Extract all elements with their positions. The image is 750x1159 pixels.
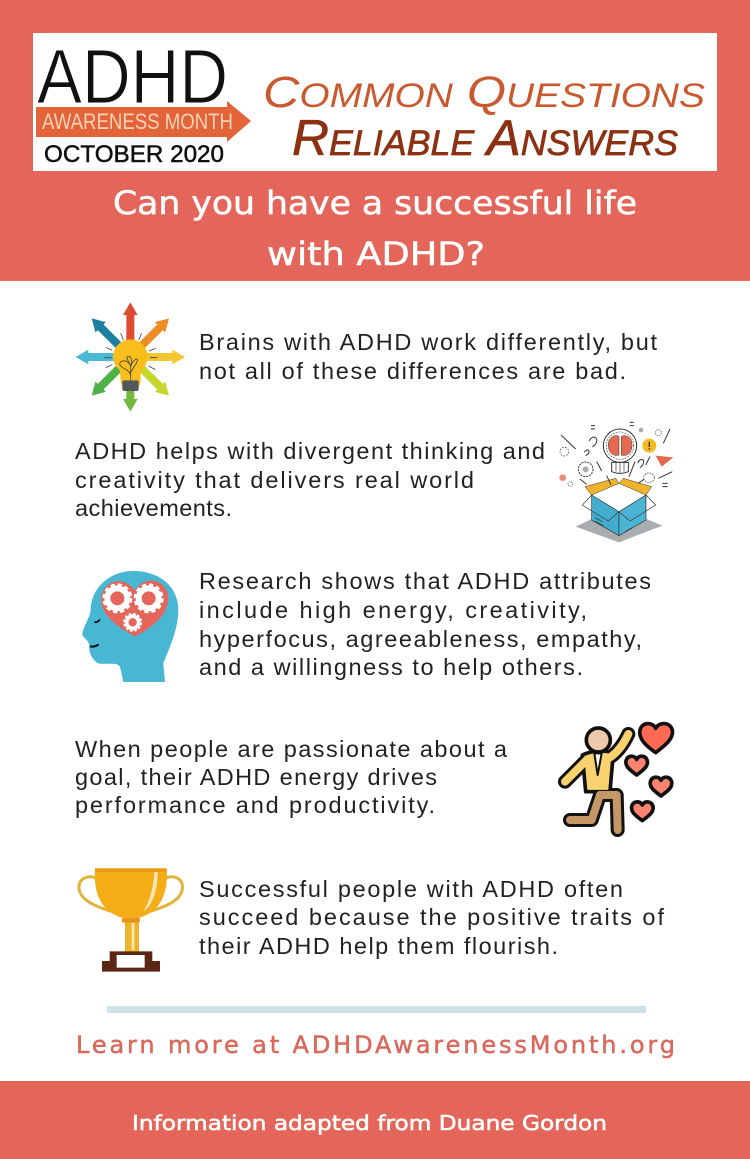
text block 2 bbox=[75, 438, 545, 521]
text block 1: Brains with ADHD work differently, but bbox=[199, 329, 657, 355]
call to action link text: Learn more at ADHDAwarenessMonth.org bbox=[76, 1031, 675, 1059]
text block 3 bbox=[199, 568, 651, 680]
icon: open box with idea bulb bbox=[559, 422, 673, 542]
banner heading: common questions: COMMON QUESTIONS bbox=[263, 68, 705, 117]
footer credit: Information adapted from Duane Gordon bbox=[132, 1111, 607, 1135]
text block 5: their ADHD help them flourish. bbox=[199, 933, 558, 959]
title: Can you have a successful life bbox=[113, 184, 637, 222]
header band bbox=[0, 0, 750, 281]
text block 2: achievements. bbox=[75, 495, 232, 521]
logo: october 2020: OCTOBER 2020 bbox=[44, 141, 224, 168]
text block 3: and a willingness to help others. bbox=[199, 654, 583, 680]
banner heading: reliable answers: RELIABLE ANSWERS bbox=[292, 110, 678, 166]
text block 1 bbox=[199, 329, 657, 384]
text block 5: succeed because the positive traits of bbox=[199, 904, 664, 930]
footer band bbox=[0, 1081, 750, 1159]
icon: head with heart and gears bbox=[82, 571, 178, 682]
text block 5: Successful people with ADHD often bbox=[199, 876, 623, 902]
text block 3: Research shows that ADHD attributes bbox=[199, 568, 651, 594]
icon: light bulb with arrows bbox=[76, 302, 185, 412]
text block 5 bbox=[199, 876, 664, 959]
text block 1: not all of these differences are bad. bbox=[199, 358, 626, 384]
text block 2: creativity that delivers real world bbox=[75, 467, 474, 493]
text block 4: performance and productivity. bbox=[75, 792, 435, 818]
title bbox=[113, 184, 637, 273]
title: with ADHD? bbox=[267, 235, 485, 273]
text block 4 bbox=[75, 736, 508, 818]
icon: person reaching for hearts bbox=[565, 724, 673, 830]
text block 2: ADHD helps with divergent thinking and bbox=[75, 438, 545, 464]
text block 4: goal, their ADHD energy drives bbox=[75, 764, 437, 790]
text block 3: include high energy, creativity, bbox=[199, 597, 587, 623]
icon: trophy bbox=[79, 868, 182, 972]
logo banner bbox=[33, 33, 717, 171]
logo: orange arrow with awareness month bbox=[36, 101, 251, 142]
text block 4: When people are passionate about a bbox=[75, 736, 508, 762]
text block 3: hyperfocus, agreeableness, empathy, bbox=[199, 626, 642, 652]
logo: orange arrow with awareness month: AWARENESS MONTH bbox=[42, 109, 233, 134]
logo: ADHD: ADHD bbox=[37, 34, 228, 120]
